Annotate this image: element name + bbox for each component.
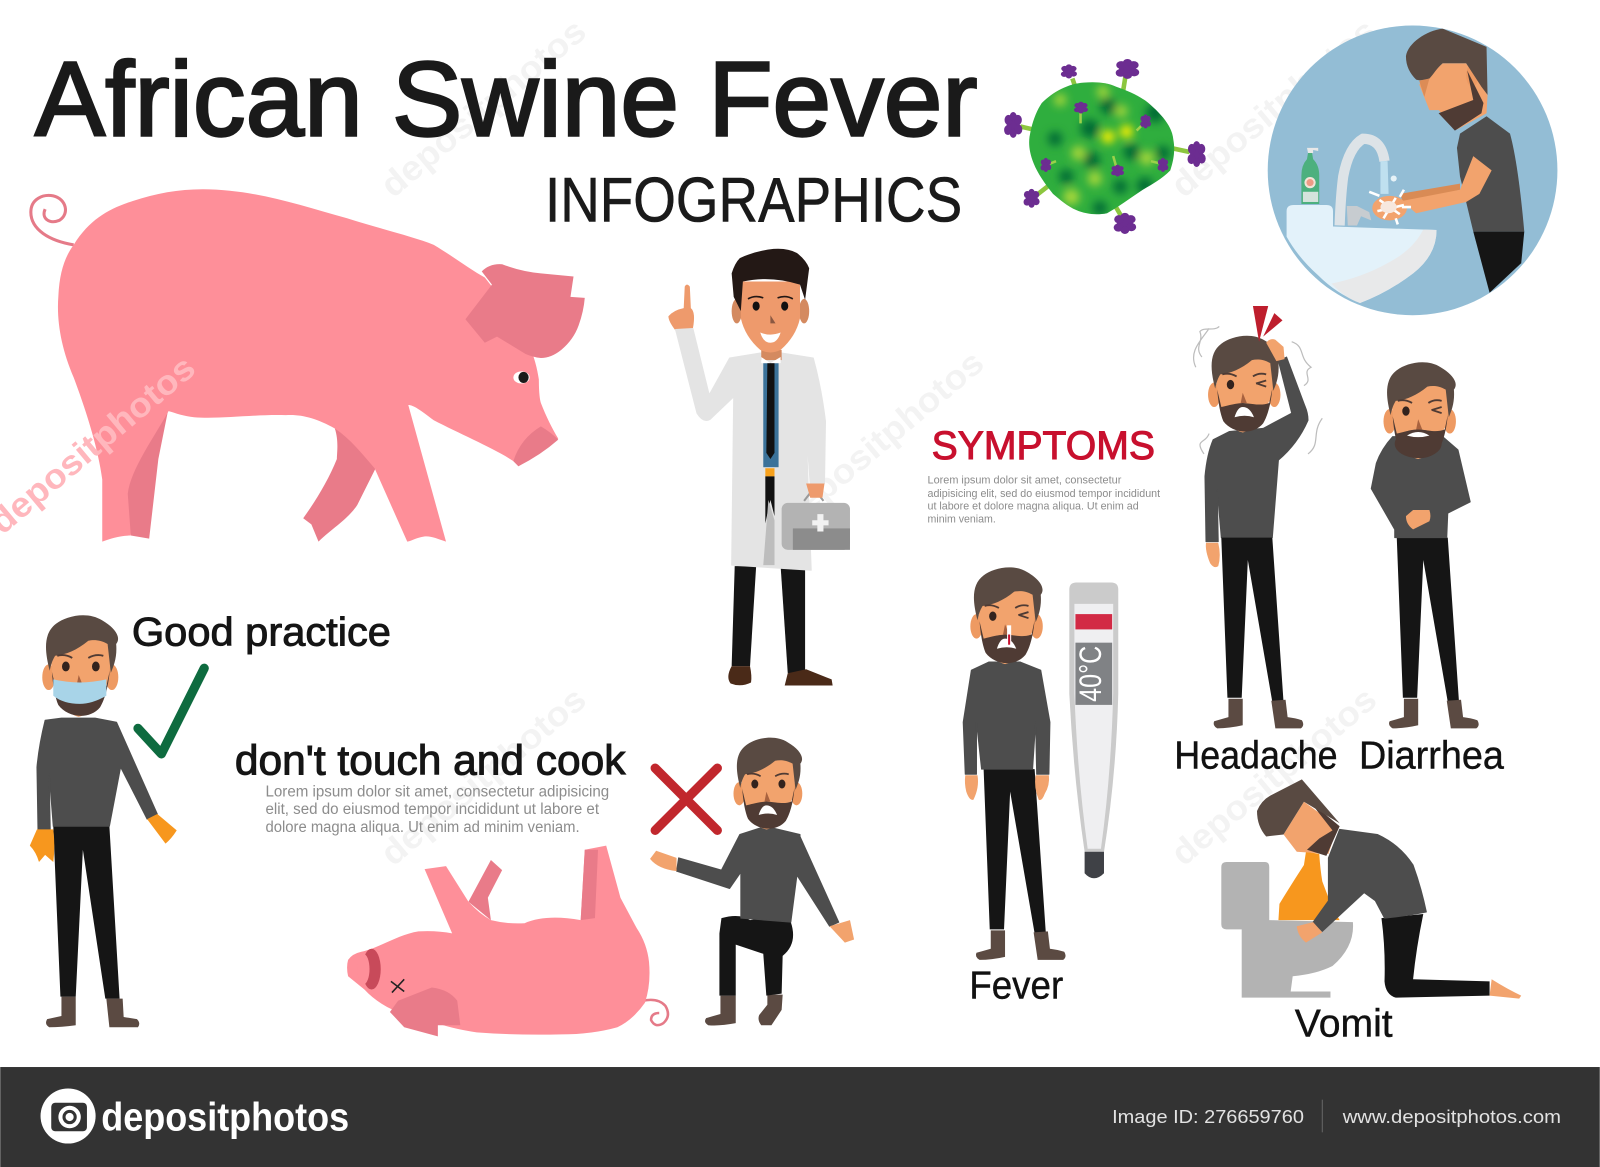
watermark pattern: depositphotos xyxy=(1164,12,1384,205)
icon: person washing hands in circle xyxy=(1268,26,1557,315)
character: diarrhea xyxy=(1371,362,1479,728)
watermark pattern: depositphotos xyxy=(374,680,593,873)
watermark pattern xyxy=(374,12,1384,873)
person: arm xyxy=(1400,184,1460,201)
text block: symptoms description: minim veniam. xyxy=(928,513,996,525)
text block: don't touch description: Lorem ipsum dolor sit amet, consectetur adipisicing xyxy=(265,784,609,801)
character: vomiting over toilet xyxy=(1221,779,1521,999)
text block: symptoms description: Lorem ipsum dolor sit amet, consectetur xyxy=(928,475,1122,487)
watermark pattern: depositphotos xyxy=(772,344,991,537)
text block: symptoms description: ut labore et dolore magna aliqua. Ut enim ad xyxy=(928,501,1139,513)
person: face and ear xyxy=(1419,63,1488,130)
watermark pattern: depositphotos xyxy=(374,12,593,205)
character: doctor xyxy=(668,249,850,686)
label: vomit: Vomit xyxy=(1295,1002,1393,1045)
icon: check mark xyxy=(138,668,204,754)
heading: symptoms: SYMPTOMS xyxy=(932,424,1155,468)
person: hair xyxy=(1406,29,1488,95)
hands and suds xyxy=(1372,196,1407,220)
icon: thermometer: 40°C xyxy=(1072,646,1108,702)
icon: red cross xyxy=(655,768,717,830)
text block: don't touch description: elit, sed do eiusmod tempor incididunt ut labore et xyxy=(265,801,600,818)
icon: thermometer xyxy=(1069,582,1118,878)
text block: symptoms description: adipisicing elit, sed do eiusmod tempor incididunt xyxy=(928,488,1161,500)
website: www.depositphotos.com xyxy=(1342,1106,1561,1127)
label: diarrhea: Diarrhea xyxy=(1359,735,1504,778)
heading: don't touch and cook: don't touch and cook xyxy=(235,736,626,783)
character: man with mask and gloves xyxy=(30,615,177,1027)
sink xyxy=(1287,205,1437,303)
subtitle: INFOGRAPHICS xyxy=(545,165,962,235)
watermark pattern: depositphotos xyxy=(1164,680,1384,873)
label: headache: Headache xyxy=(1174,735,1338,778)
logo: wordmark: depositphotos xyxy=(101,1095,349,1139)
title: African Swine Fever xyxy=(35,41,977,159)
label: fever: Fever xyxy=(969,965,1063,1008)
person: beard xyxy=(1439,70,1483,131)
illustration: big pig xyxy=(0,189,585,542)
soap bottle xyxy=(1301,153,1319,204)
logo: camera xyxy=(41,1088,96,1144)
image id: Image ID: 276659760 xyxy=(1112,1106,1304,1127)
illustration: dead pig xyxy=(347,846,668,1036)
label: good practice: Good practice xyxy=(132,611,391,655)
faucet xyxy=(1340,139,1385,225)
text block: don't touch description: dolore magna aliqua. Ut enim ad minim veniam. xyxy=(265,819,580,836)
character: headache xyxy=(1194,306,1322,728)
text block: symptoms description xyxy=(928,475,1161,525)
text block: don't touch description xyxy=(265,784,609,836)
character: crouching man xyxy=(650,738,854,1025)
icon: virus xyxy=(1004,59,1206,234)
character: fever xyxy=(963,567,1066,960)
person: shirt and pants xyxy=(1457,116,1524,232)
footer bar xyxy=(0,1067,1600,1167)
